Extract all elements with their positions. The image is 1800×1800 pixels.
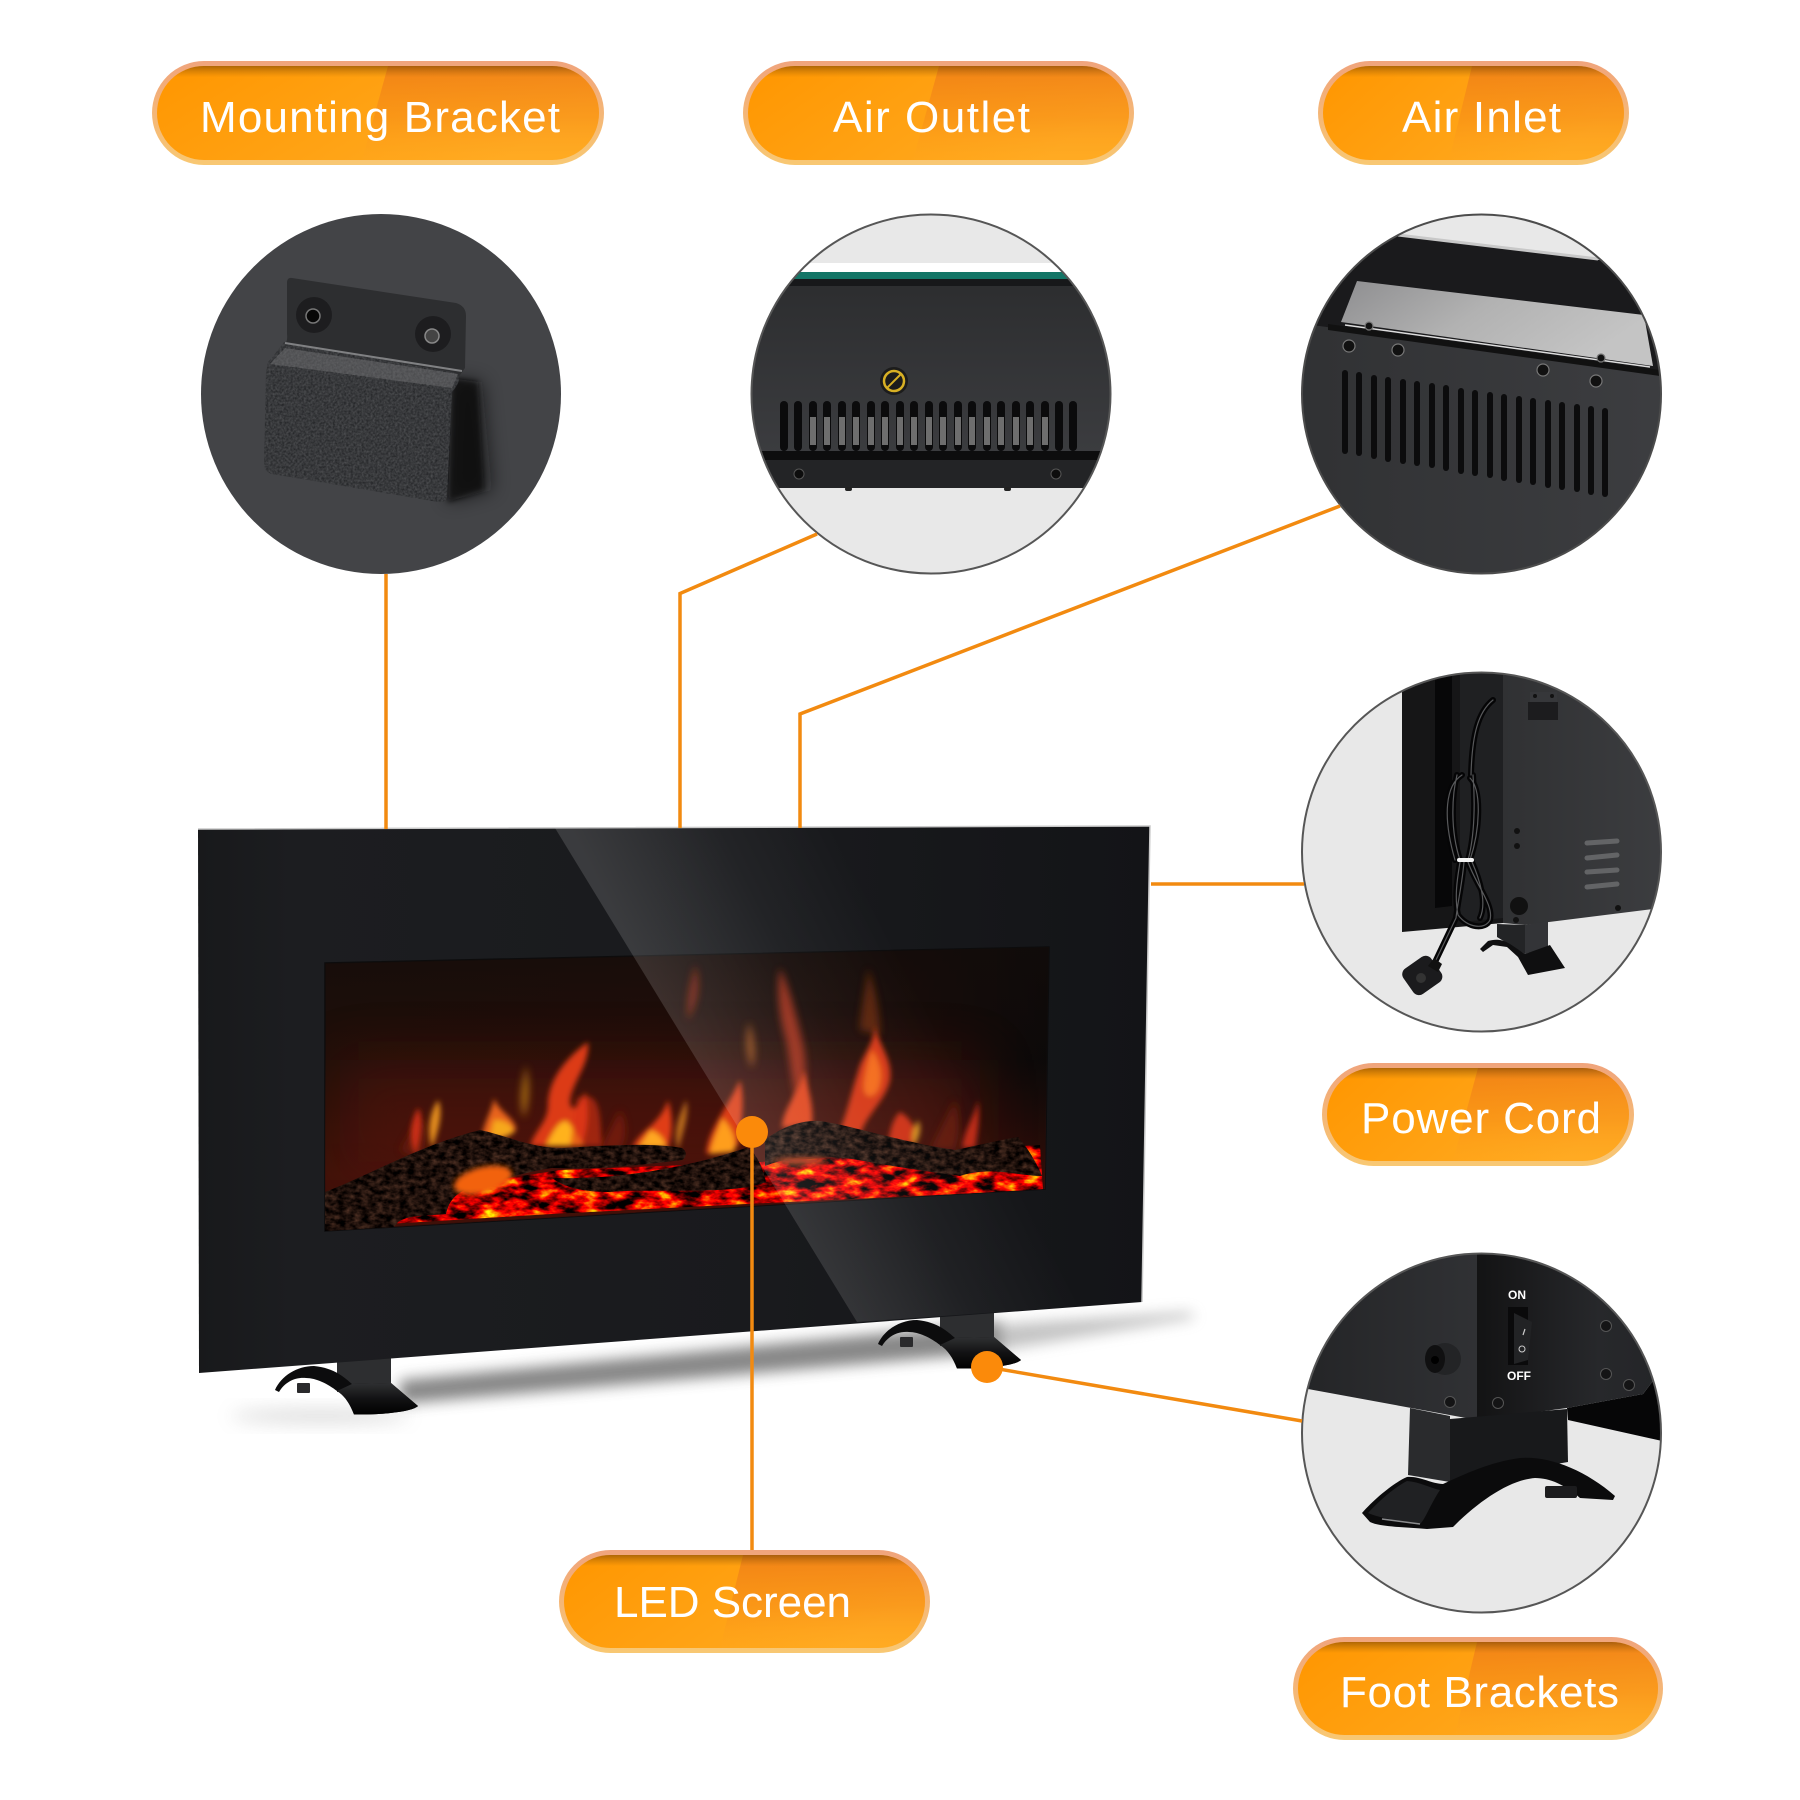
label: power cord: Power Cord [1361,1094,1601,1143]
detail circle: foot bracket [1301,1252,1662,1614]
side panel [1503,674,1660,925]
rear body [1303,326,1660,572]
plug [1402,956,1442,996]
switch off label: OFF [1507,1369,1531,1383]
screen background [325,947,1049,1231]
bracket upper plate [286,278,466,375]
leader line and dot: foot brackets [971,1351,1302,1421]
detail circle: power cord [1302,660,1680,1032]
bracket lower plate [264,342,459,502]
left foot of fireplace [275,1350,418,1415]
power cable [1436,700,1493,960]
silver plate [1341,281,1653,366]
label: foot brackets [1293,1637,1664,1740]
switch on label: ON [1508,1288,1526,1302]
screws [1343,322,1605,387]
screws [1444,1320,1634,1408]
logs [325,1121,1042,1232]
label: mounting bracket: Mounting Bracket [200,93,560,142]
screw right [415,316,451,352]
glass body [198,826,1150,1373]
right foot of fireplace [878,1304,1021,1369]
flames and logs [325,947,1049,1232]
plate lip [1328,324,1660,376]
screws and grommet [1510,828,1621,923]
dim tall flames [400,965,959,1160]
mini bracket [1528,692,1558,720]
label: foot brackets: Foot Brackets [1340,1668,1619,1717]
panel body [750,279,1112,451]
bright flames [411,1025,979,1155]
fireplace floor shadow [230,1312,1195,1422]
label: power cord [1322,1063,1634,1166]
black panel edge [1316,236,1658,370]
cable tie [1457,858,1474,862]
label: air inlet: Air Inlet [1402,93,1561,142]
label: air outlet: Air Outlet [833,93,1030,142]
label: air outlet [743,61,1135,165]
warning sticker [880,367,908,395]
leader line and dot: LED screen [736,1116,768,1552]
front face [1477,1254,1652,1417]
leader line: air inlet [800,506,1340,828]
rocker switch [1507,1288,1532,1383]
grommet [1425,1343,1461,1375]
label: air inlet [1318,61,1630,165]
leader line: air outlet [680,534,817,828]
rear black panel [1567,1382,1660,1440]
detail circle: air outlet [750,214,1112,574]
rubber peg [1545,1486,1577,1498]
vent slots [1342,370,1608,497]
label: mounting bracket [152,61,605,165]
post [1408,1408,1450,1482]
label: LED screen: LED Screen [614,1578,851,1627]
bracket shadow [448,378,484,502]
vent louvers [1587,841,1617,887]
arch foot [1362,1458,1615,1529]
glass edge highlights [198,826,1150,1302]
glass reflection [555,826,1150,1322]
rear panel [1402,660,1503,932]
lower rail [750,451,1112,460]
vent slots [780,401,1077,451]
label: LED screen [559,1550,930,1653]
leader line: mounting bracket [384,574,388,829]
leader line: power cord [1151,882,1304,886]
left side face [1308,1254,1477,1418]
glowing embers [388,1145,1043,1224]
detail circle: mounting bracket [201,214,561,574]
log glow spot [451,1160,515,1200]
detail circle: air inlet [1301,214,1662,574]
screw left [296,297,332,333]
fireplace panel [198,826,1150,1373]
stand foot [1480,921,1565,975]
